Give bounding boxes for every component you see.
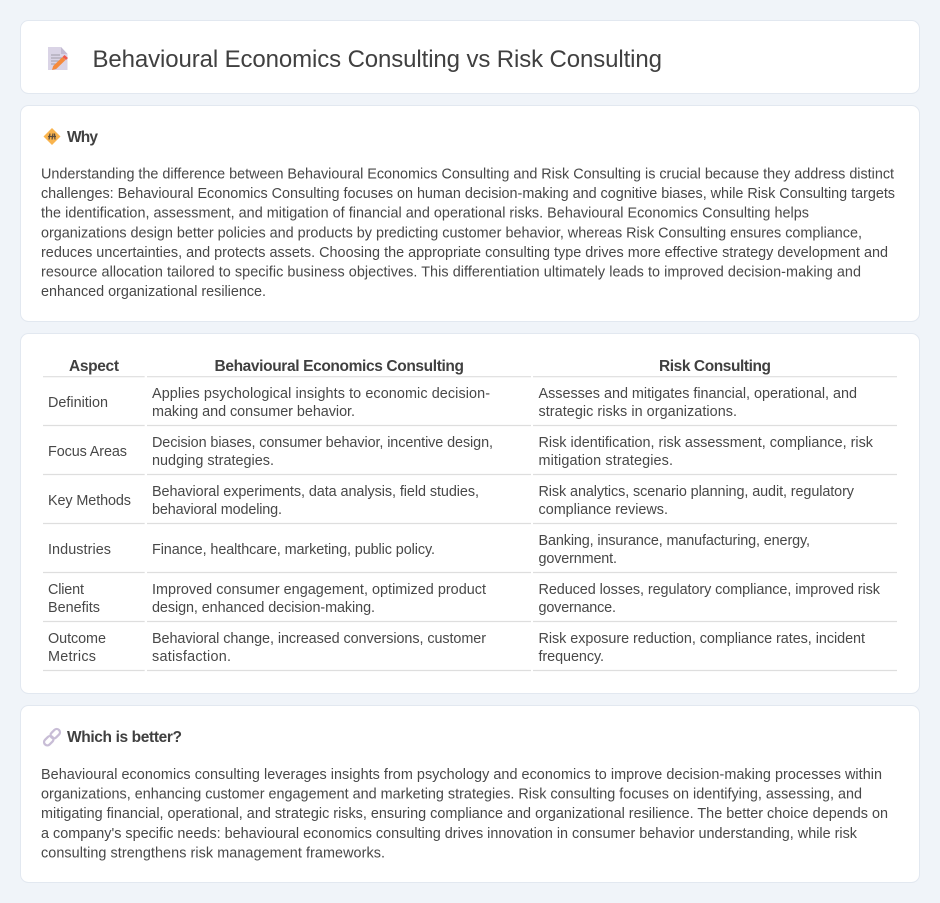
text block: recommendation: organizations, enhancing customer engagement and marketing strategies. Risk consulting focuses on identifying, assessing, and	[41, 787, 862, 803]
icon: warning diamond	[44, 128, 60, 145]
table row: client benefits: Reduced losses, regulatory compliance, improved risk	[538, 582, 881, 598]
table header row	[43, 358, 897, 377]
panel: comparison table	[20, 334, 920, 694]
table header row: Aspect	[69, 358, 119, 375]
table row: focus areas: mitigation strategies.	[538, 453, 673, 469]
title: Behavioural Economics Consulting vs Risk Consulting	[92, 46, 662, 73]
text block: recommendation: a company's specific needs: behavioural economics consulting drives innovation in consumer behavior understanding, while risk	[41, 826, 858, 842]
table row: industries: Industries	[48, 542, 111, 558]
table row: client benefits: Client	[48, 582, 84, 598]
table header row: Risk Consulting	[659, 358, 771, 375]
table row: key methods: behavioral modeling.	[152, 502, 282, 518]
text block: why explanation: enhanced organizational resilience.	[41, 284, 266, 300]
table row: definition: making and consumer behavior.	[152, 404, 355, 420]
table row: focus areas: Risk identification, risk assessment, compliance, risk	[538, 435, 874, 451]
table row: definition	[43, 386, 897, 426]
text block: why explanation: challenges: Behavioural Economics Consulting focuses on human decision-making and cognitive biases, while Risk Consulting targets	[41, 186, 895, 202]
panel: why	[20, 106, 920, 322]
table row: outcome metrics: Metrics	[48, 649, 96, 665]
table row: definition: Assesses and mitigates financial, operational, and	[538, 386, 857, 402]
table row: key methods: compliance reviews.	[538, 502, 668, 518]
table row: definition: Applies psychological insights to economic decision-	[152, 386, 490, 402]
text block: why explanation: Understanding the difference between Behavioural Economics Consulting and Risk Consulting is crucial because they address distinct	[41, 166, 894, 182]
table row: outcome metrics: Risk exposure reduction, compliance rates, incident	[538, 631, 865, 647]
text block: why explanation	[41, 166, 895, 300]
text block: why explanation: reduces uncertainties, and protects assets. Choosing the appropriate consulting type drives more effective strategy development and	[41, 245, 888, 261]
table row: focus areas: Focus Areas	[48, 444, 127, 460]
text block: why explanation: resource allocation tailored to specific business objectives. This differentiation ultimately leads to improved decision-making and	[41, 264, 861, 280]
table row: client benefits	[43, 582, 897, 622]
panel: which is better	[20, 706, 920, 882]
text block: why explanation: the identification, assessment, and mitigation of financial and operational risks. Behavioural Economics Consulting helps	[41, 206, 809, 222]
table row: outcome metrics: Outcome	[48, 631, 106, 647]
table row: outcome metrics: Behavioral change, increased conversions, customer	[152, 631, 486, 647]
table row: client benefits: design, enhanced decision-making.	[152, 600, 375, 616]
panel: title header	[20, 20, 920, 94]
table row: key methods: Behavioral experiments, data analysis, field studies,	[152, 484, 479, 500]
table row: industries: Banking, insurance, manufacturing, energy,	[538, 533, 810, 549]
table row: focus areas: nudging strategies.	[152, 453, 274, 469]
table row: industries: Finance, healthcare, marketing, public policy.	[152, 542, 435, 558]
table row: focus areas: Decision biases, consumer behavior, incentive design,	[152, 435, 493, 451]
table row: definition: strategic risks in organizations.	[538, 404, 737, 420]
table row: outcome metrics: frequency.	[538, 649, 604, 665]
table row: key methods	[43, 484, 897, 524]
table row: key methods: Key Methods	[48, 493, 131, 509]
text block: why explanation: organizations design better policies and products by predicting customer behavior, whereas Risk Consulting ensures compliance,	[41, 225, 862, 241]
table row: key methods: Risk analytics, scenario planning, audit, regulatory	[538, 484, 855, 500]
table row: client benefits: Improved consumer engagement, optimized product	[152, 582, 486, 598]
table row: industries: government.	[538, 551, 617, 567]
table header row: Behavioural Economics Consulting	[214, 358, 464, 375]
table row: industries	[43, 533, 897, 572]
heading: which is better: Which is better?	[67, 729, 182, 746]
table row: client benefits: Benefits	[48, 600, 100, 616]
table row: client benefits: governance.	[538, 600, 616, 616]
text block: recommendation: mitigating financial, operational, and strategic risks, ensuring compliance and organizational resilience. The better choice depends on	[41, 806, 888, 822]
table row: outcome metrics	[43, 631, 897, 670]
icon: document with pencil	[48, 47, 68, 70]
text block: recommendation: Behavioural economics consulting leverages insights from psychology and economics to improve decision-making processes within	[41, 767, 882, 783]
heading: why: Why	[67, 129, 98, 146]
table row: definition: Definition	[48, 395, 108, 411]
icon: chain link	[43, 728, 61, 747]
table row: outcome metrics: satisfaction.	[152, 649, 231, 665]
table row: focus areas	[43, 435, 897, 474]
text block: recommendation: consulting strengthens risk management frameworks.	[41, 845, 385, 861]
text block: recommendation	[41, 767, 888, 861]
